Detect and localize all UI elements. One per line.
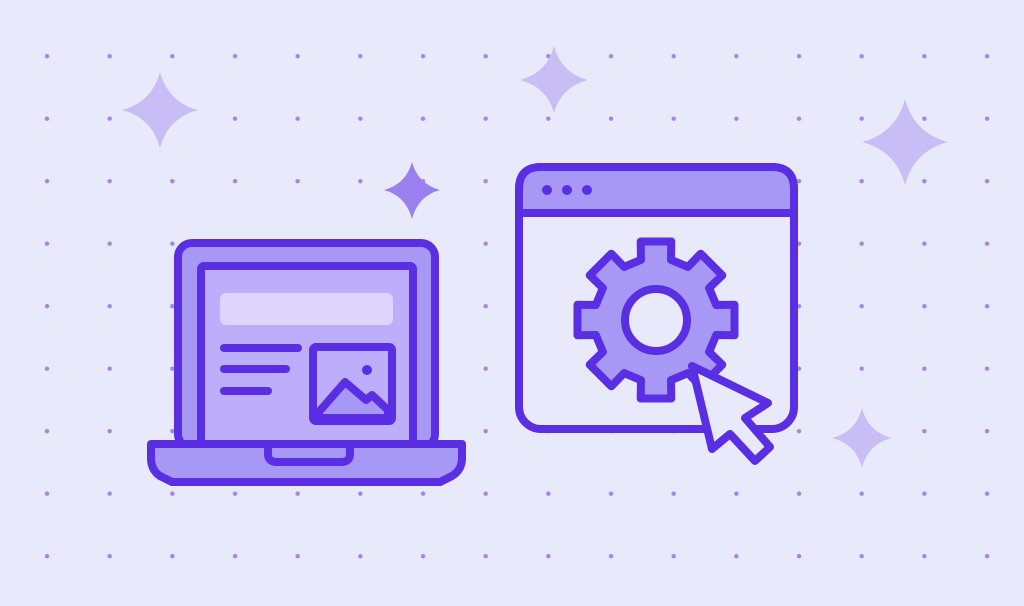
sparkle: top right <box>862 99 948 185</box>
icon: laptop <box>151 243 462 482</box>
sparkle: bottom right <box>832 408 892 468</box>
sparkle: top left <box>122 72 198 148</box>
icon: browser window with gear <box>519 167 794 461</box>
icon: cursor arrow <box>692 366 770 461</box>
sparkle: small dark <box>384 162 440 219</box>
sparkle: top center <box>520 46 588 113</box>
icon: gear <box>578 242 734 398</box>
